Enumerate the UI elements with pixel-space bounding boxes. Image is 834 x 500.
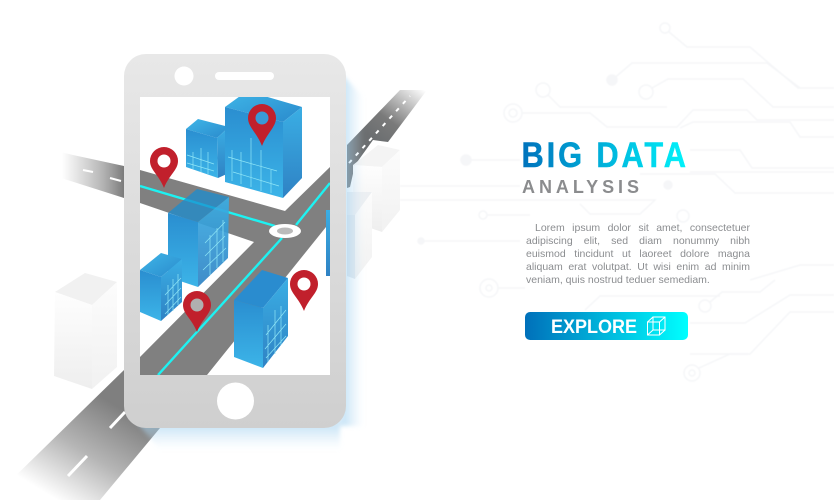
camera <box>174 66 194 86</box>
screen <box>140 97 330 375</box>
building: lower left <box>140 253 182 321</box>
map pin: left road <box>150 147 178 188</box>
building: lower right <box>234 270 288 368</box>
body paragraph: Lorem ipsum dolor sit amet, consectetuer <box>535 222 750 234</box>
home button <box>217 382 254 420</box>
building: right edge <box>326 210 330 276</box>
white building: lower right <box>347 192 372 279</box>
roundabout <box>269 224 301 238</box>
phone shadow <box>135 72 364 450</box>
body paragraph: aliquam erat volutpat. Ut wisi enim ad minim <box>526 261 750 273</box>
subtitle: ANALYSIS: ANALYSIS <box>522 177 639 197</box>
map pin: lower right <box>290 270 318 311</box>
map pin: large building <box>248 104 276 146</box>
building: back large <box>225 91 302 198</box>
city map on screen <box>140 91 330 375</box>
white building: left <box>54 273 117 389</box>
road network <box>140 167 330 375</box>
map pin: lower road <box>183 291 211 332</box>
speaker <box>215 72 274 80</box>
phone <box>124 54 346 428</box>
building: middle <box>168 189 229 287</box>
road dash <box>83 170 93 172</box>
road: bottom-left segment <box>0 370 160 500</box>
body paragraph: veniam, quis nostrud teduer semediam. <box>526 274 710 286</box>
building: back small <box>186 119 229 178</box>
road: top-right segment <box>347 90 427 188</box>
body paragraph: adipiscing elit, sed diam nonummy nibh <box>526 235 750 247</box>
icon: cube <box>648 317 665 335</box>
button: EXPLORE: EXPLORE <box>551 317 637 338</box>
white building: upper right <box>353 145 400 232</box>
cyan route <box>140 183 330 375</box>
road: top-left segment <box>58 152 124 198</box>
body paragraph <box>526 222 750 286</box>
button: EXPLORE <box>525 312 688 340</box>
circuit board background <box>400 23 834 381</box>
body paragraph: euismod tincidunt ut laoreet dolore magna <box>526 248 750 260</box>
phone body <box>124 54 346 428</box>
title: BIG DATA: BIG DATA <box>522 135 686 174</box>
